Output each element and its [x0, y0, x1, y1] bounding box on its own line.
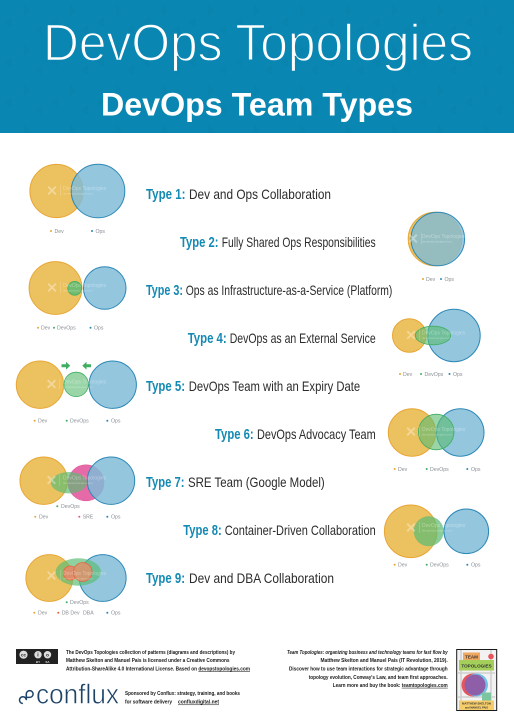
heading: type 5: Type 5: [146, 379, 185, 395]
diagram: type 5 [16, 361, 136, 424]
legend [33, 600, 121, 617]
legend [422, 277, 454, 283]
legend: Dev [54, 229, 64, 235]
diagram: type 7: DevOps Topologies [63, 476, 107, 482]
diagram: type 3: devopstopologies.com [63, 288, 93, 292]
diagram: type 4 [392, 309, 480, 378]
licence text: Attribution-ShareAlike 4.0 International License. Based on devopstopologies.com [66, 666, 250, 672]
diagram: type 1 [30, 164, 125, 235]
arrow: right [62, 362, 70, 370]
licence badge: i [37, 652, 39, 658]
legend: Ops [94, 326, 104, 332]
diagram: type 9: devopstopologies.com [63, 576, 93, 580]
legend: DB Dev [62, 611, 80, 617]
heading: type 7 [146, 475, 325, 491]
diagram: type 4: devopstopologies.com [422, 336, 452, 340]
licence badge: cc [21, 652, 26, 657]
diagram: type 1: devopstopologies.com [63, 192, 93, 196]
legend: Ops [111, 515, 121, 521]
diagram: type 6: devopstopologies.com [422, 432, 452, 436]
licence text: Matthew Skelton and Manuel Pais is licensed under a Creative Commons [66, 658, 230, 664]
title: DevOps Topologies [43, 14, 473, 72]
diagram: type 2: devopstopologies.com [422, 240, 452, 244]
diagram: type 8 [384, 505, 489, 568]
legend: Dev [38, 611, 48, 617]
diagram: type 9 [26, 555, 126, 617]
heading: type 7: Type 7: [146, 475, 184, 491]
heading: type 2: Type 2: [180, 235, 218, 251]
licence text: The DevOps Topologies collection of patterns (diagrams and descriptions) by [66, 650, 235, 656]
diagram: type 4: DevOps Topologies [422, 330, 466, 336]
book cover [457, 650, 497, 710]
legend [50, 229, 105, 235]
heading: type 3: Ops as Infrastructure-as-a-Service (Platform) [186, 283, 392, 298]
book description: Discover how to use team interactions for strategic advantage through [289, 666, 448, 672]
heading: type 5 [146, 379, 360, 395]
conflux logo: conflux [36, 678, 119, 710]
heading: type 9 [146, 571, 334, 587]
legend: Ops [453, 372, 463, 378]
legend: Ops [444, 277, 454, 283]
legend: Dev [398, 467, 408, 473]
diagram: type 2 [408, 212, 466, 283]
book cover: MATTHEW SKELTON [462, 702, 491, 706]
legend: Dev [41, 326, 51, 332]
legend: Ops [471, 467, 481, 473]
diagram: type 5: DevOps Topologies [63, 380, 107, 386]
diagram: type 6: DevOps Topologies [422, 427, 466, 433]
legend: Dev [39, 515, 49, 521]
heading: type 8 [183, 523, 376, 539]
diagram: type 1: DevOps Topologies [63, 186, 107, 192]
legend: DevOps [430, 562, 449, 568]
legend: Dev [38, 418, 48, 424]
diagram: type 6 [388, 409, 484, 473]
heading: type 5: DevOps Team with an Expiry Date [189, 379, 360, 394]
legend [34, 504, 121, 521]
heading: type 7: SRE Team (Google Model) [188, 475, 325, 490]
sponsor text [125, 691, 240, 706]
book description: topology evolution, Conway's Law, and team first approaches. [309, 675, 448, 681]
heading: type 8: Type 8: [183, 523, 222, 539]
diagram: type 2: DevOps Topologies [422, 234, 466, 240]
diagram: type 5: devopstopologies.com [63, 385, 93, 389]
sponsor text: confluxdigital.net [178, 700, 219, 706]
header banner [0, 0, 514, 133]
legend: DevOps [57, 326, 76, 332]
heading: type 9: Dev and DBA Collaboration [189, 571, 334, 586]
legend: Dev [398, 562, 408, 568]
heading: type 9: Type 9: [146, 571, 185, 587]
heading: type 6: DevOps Advocacy Team [257, 427, 376, 442]
legend: Dev [426, 277, 436, 283]
heading: type 8: Container-Driven Collaboration [225, 523, 376, 538]
licence badge: o [46, 654, 49, 658]
legend: DBA [83, 611, 94, 617]
diagram: type 9: DevOps Topologies [63, 571, 107, 577]
licence badge: SA [45, 660, 50, 664]
legend: Ops [96, 229, 105, 235]
legend: Ops [111, 418, 121, 424]
heading: type 4: Type 4: [188, 331, 227, 347]
book cover: TOPOLOGIES [461, 664, 492, 668]
subtitle: DevOps Team Types [101, 86, 413, 122]
legend: SRE [83, 515, 94, 521]
book description: Learn more and buy the book: teamtopologies.com [333, 683, 448, 689]
book description [287, 650, 449, 689]
legend: Ops [471, 562, 481, 568]
diagram: type 8: devopstopologies.com [422, 528, 452, 532]
licence badge [16, 649, 58, 664]
diagram: type 8: DevOps Topologies [422, 523, 466, 529]
heading: type 4 [188, 331, 376, 347]
book cover: TEAM [465, 655, 478, 660]
heading: type 6 [215, 427, 376, 443]
legend: Dev [403, 372, 413, 378]
heading: type 4: DevOps as an External Service [230, 331, 376, 346]
book description: Matthew Skelton and Manuel Pais (IT Revolution, 2019). [320, 658, 448, 664]
heading: type 2: Fully Shared Ops Responsibilities [222, 235, 376, 250]
legend: Ops [111, 611, 121, 617]
legend: DevOps [430, 467, 449, 473]
heading: type 3 [146, 283, 392, 299]
book description: Team Topologies: organizing business and technology teams for fast flow by [287, 650, 449, 656]
licence badge: BY [36, 660, 40, 664]
diagram: type 7 [20, 457, 135, 521]
legend [34, 418, 121, 424]
legend [394, 562, 481, 568]
arrow: left [82, 362, 91, 370]
legend: DevOps [70, 418, 89, 424]
heading: type 2 [180, 235, 376, 251]
legend: DevOps [424, 372, 444, 378]
heading: type 3: Type 3: [146, 283, 183, 299]
heading: type 6: Type 6: [215, 427, 254, 443]
legend: DevOps [70, 600, 89, 606]
heading: type 1: Dev and Ops Collaboration [189, 187, 331, 202]
diagram: type 3 [29, 262, 126, 332]
heading: type 1 [146, 187, 331, 203]
diagram: type 7: devopstopologies.com [63, 481, 93, 485]
sponsor text: Sponsored by Conflux: strategy, training, and books [125, 691, 240, 697]
legend [37, 326, 104, 332]
legend [399, 372, 463, 378]
licence text [66, 650, 250, 672]
sponsor text: for software delivery [125, 700, 172, 706]
diagram: type 3: DevOps Topologies [63, 283, 107, 289]
legend: DevOps [61, 504, 80, 510]
legend [394, 467, 481, 473]
book cover: and MANUEL PAIS [465, 705, 488, 709]
heading: type 1: Type 1: [146, 187, 186, 203]
